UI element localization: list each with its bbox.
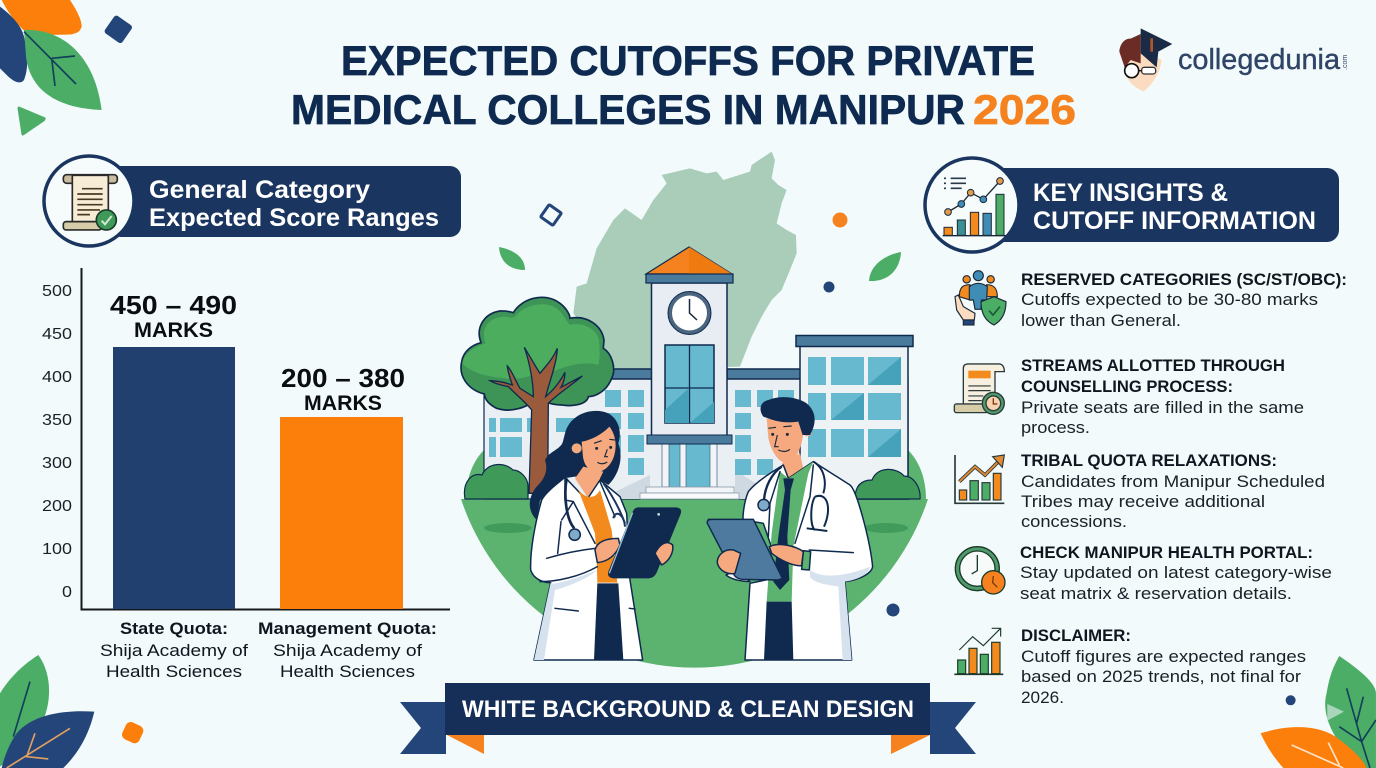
insight: disclaimer (954, 626, 1306, 707)
decoration: bottom-right leaves (1261, 656, 1376, 768)
y axis labels: 100 (42, 541, 72, 558)
insight: tribal quota: Tribes may receive additional (1021, 493, 1265, 511)
panel heading: key insights: CUTOFF INFORMATION (1033, 207, 1316, 235)
panel heading: general category (44, 156, 461, 246)
x label: management quota: Shija Academy of (273, 642, 422, 660)
insight: disclaimer: 2026. (1021, 689, 1064, 707)
bar: state quota: MARKS (134, 319, 213, 342)
y axis labels: 300 (42, 455, 72, 472)
title: MEDICAL COLLEGES IN MANIPUR (291, 86, 965, 133)
y axis labels: 200 (42, 498, 72, 515)
insight: health portal: CHECK MANIPUR HEALTH PORTAL: (1020, 543, 1313, 562)
icon: document with clock (954, 364, 1004, 414)
x label: management quota: Management Quota: (258, 620, 437, 638)
panel heading: general category: General Category (149, 176, 370, 204)
ribbon banner: WHITE BACKGROUND & CLEAN DESIGN (462, 696, 914, 723)
insight: reserved categories: RESERVED CATEGORIES (SC/ST/OBC): (1021, 270, 1347, 289)
insight: tribal quota: concessions. (1021, 513, 1127, 531)
bar: management quota (280, 363, 405, 609)
windows: right wing (735, 390, 794, 475)
logo: collegedunia: collegedunia (1178, 44, 1341, 76)
hospital building (480, 247, 913, 499)
insight: counselling process: process. (1021, 419, 1090, 437)
central illustration (461, 152, 928, 668)
insight: reserved categories (955, 270, 1347, 330)
insight: tribal quota: Candidates from Manipur Scheduled (1021, 473, 1325, 491)
insight: counselling process (954, 356, 1304, 437)
insight: disclaimer: DISCLAIMER: (1021, 626, 1131, 645)
logo: collegedunia: .com (1342, 55, 1349, 70)
insight: disclaimer: Cutoff figures are expected ranges (1021, 648, 1306, 666)
insight: disclaimer: based on 2025 trends, not final for (1021, 668, 1302, 686)
insight: counselling process: STREAMS ALLOTTED THROUGH (1021, 356, 1285, 375)
y axis labels: 500 (42, 283, 72, 300)
x label: state quota: State Quota: (120, 620, 228, 638)
doctor: female (530, 411, 681, 660)
insight: tribal quota: TRIBAL QUOTA RELAXATIONS: (1021, 451, 1277, 470)
title: 2026 (973, 86, 1076, 133)
y axis labels (42, 283, 72, 601)
decoration: bottom-left leaves (0, 655, 145, 768)
icon: chart with trend line (943, 178, 1006, 236)
icon: scroll with check (63, 175, 117, 230)
insight: reserved categories: lower than General. (1021, 312, 1181, 330)
y axis labels: 350 (42, 412, 72, 429)
x label: management quota: Health Sciences (280, 663, 415, 681)
title: EXPECTED CUTOFFS FOR PRIVATE (341, 37, 1035, 84)
icon: bar chart with arrow (954, 628, 1003, 674)
insight: counselling process: COUNSELLING PROCESS: (1021, 377, 1233, 396)
y axis labels: 0 (62, 584, 72, 601)
insight: health portal: Stay updated on latest category-wise (1020, 564, 1332, 582)
tree (461, 297, 614, 493)
bar: state quota: 450 – 490 (110, 290, 237, 320)
panel heading: general category: Expected Score Ranges (149, 204, 439, 232)
icon: people with shield (955, 271, 1006, 325)
right block (796, 336, 913, 499)
ribbon banner (400, 683, 976, 754)
bar: management quota: MARKS (304, 392, 382, 415)
y axis labels: 400 (42, 369, 72, 386)
entrance (640, 435, 739, 499)
insight: health portal: seat matrix & reservation details. (1020, 585, 1292, 603)
logo: collegedunia (1119, 28, 1349, 92)
insight: reserved categories: Cutoffs expected to be 30-80 marks (1021, 291, 1318, 309)
map of Manipur (573, 152, 797, 370)
clock tower (646, 247, 733, 437)
windows: left wing (489, 390, 644, 475)
x label: state quota (100, 620, 248, 681)
floating accents (499, 205, 901, 616)
icon: rising bar chart (955, 455, 1004, 503)
panel heading: key insights (925, 158, 1339, 252)
bar: management quota: 200 – 380 (281, 363, 405, 393)
y axis labels: 450 (42, 326, 72, 343)
decoration: top-left leaves (0, 0, 133, 136)
x label: management quota (258, 620, 437, 681)
title (291, 37, 1076, 133)
bar: state quota (110, 290, 237, 609)
doctor: male (707, 397, 873, 660)
insight: health portal (955, 543, 1332, 603)
insight: tribal quota (955, 451, 1325, 531)
bushes (464, 465, 920, 499)
x label: state quota: Health Sciences (106, 663, 242, 681)
insight: counselling process: Private seats are filled in the same (1021, 399, 1304, 417)
bar chart (42, 268, 450, 681)
icon: clock with badge (955, 547, 1005, 594)
x label: state quota: Shija Academy of (100, 642, 248, 660)
green ground (461, 450, 928, 668)
panel heading: key insights: KEY INSIGHTS & (1033, 179, 1228, 207)
icon: clock (668, 292, 711, 334)
